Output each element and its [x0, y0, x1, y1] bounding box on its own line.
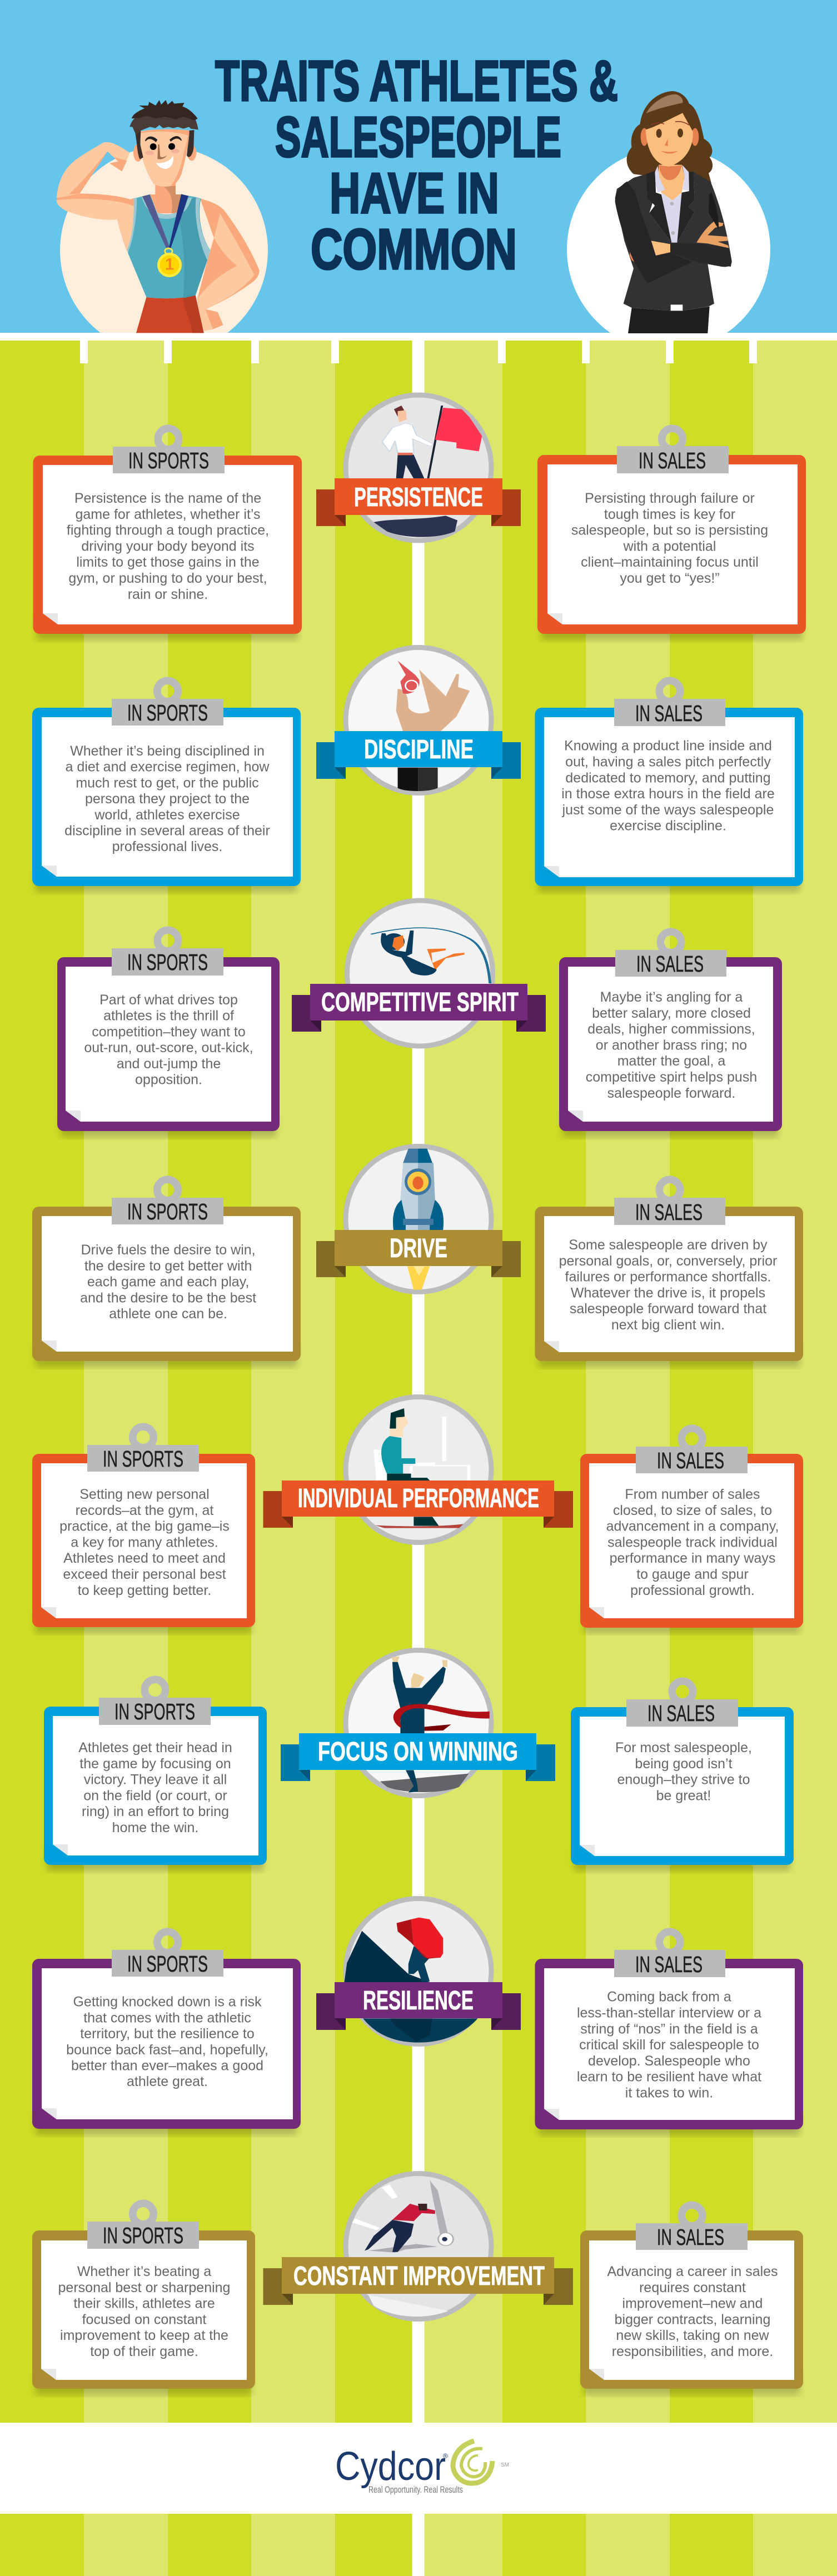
banner: resilience: RESILIENCE	[363, 1986, 474, 2015]
in sports card: fighting through a tough practice,	[67, 523, 269, 538]
trait row 3: competitive spirit	[57, 901, 782, 1137]
in sales card	[580, 1428, 803, 1633]
in sales card: dedicated to memory, and putting	[565, 770, 771, 786]
in sales card: matter the goal, a	[617, 1053, 725, 1069]
in sports card: that comes with the athletic	[83, 2010, 251, 2025]
in sports card: bounce back fast–and, hopefully,	[66, 2042, 268, 2058]
header panel	[0, 0, 837, 354]
in sales card: Whatever the drive is, it propels	[571, 1285, 765, 1300]
in sales card: Maybe it’s angling for a	[600, 989, 743, 1005]
in sports card: Persistence is the name of the	[74, 491, 261, 506]
in sports card	[32, 681, 301, 892]
footer band with logo	[0, 2423, 837, 2514]
in sales card: you get to “yes!”	[620, 571, 720, 586]
title: SALESPEOPLE	[275, 105, 561, 169]
in sports card: Athletes need to meet and	[63, 1550, 226, 1566]
in sales card: critical skill for salespeople to	[579, 2037, 759, 2053]
in sales card: to gauge and spur	[636, 1567, 749, 1582]
in sports card: personal best or sharpening	[58, 2280, 230, 2295]
in sports card: each game and each play,	[87, 1274, 249, 1290]
in sales card: For most salespeople,	[615, 1740, 752, 1755]
in sports card: competition–they want to	[92, 1024, 246, 1039]
in sports card: to keep getting better.	[78, 1583, 211, 1598]
medallion: person at desk	[346, 1397, 491, 1542]
icon: athlete with medal: 1	[165, 256, 174, 274]
in sales card: IN SALES	[639, 448, 706, 473]
in sports card: territory, but the resilience to	[80, 2026, 255, 2042]
in sales card: deals, higher commissions,	[587, 1022, 755, 1037]
in sales card: IN SALES	[635, 1952, 703, 1977]
in sports card: practice, at the big game–is	[59, 1519, 230, 1534]
trait row 8: constant improvement	[32, 2173, 803, 2395]
in sports card: better than ever–makes a good	[71, 2058, 263, 2073]
in sports card: Whether it’s beating a	[77, 2264, 211, 2279]
in sports card	[32, 1932, 301, 2135]
banner: discipline: DISCIPLINE	[364, 735, 474, 764]
in sales card: enough–they strive to	[617, 1772, 750, 1788]
in sports card: Drive fuels the desire to win,	[81, 1242, 256, 1258]
banner: persistence: PERSISTENCE	[354, 483, 483, 512]
in sports card: Whether it’s being disciplined in	[70, 743, 265, 759]
in sports card: gym, or pushing to do your best,	[68, 571, 267, 586]
in sales card: it takes to win.	[625, 2085, 713, 2101]
in sports card: athlete great.	[127, 2074, 208, 2089]
medallion: rocket	[346, 1147, 491, 1292]
banner: focus on winning	[281, 1733, 555, 1781]
in sales card: next big client win.	[611, 1317, 725, 1333]
in sports card: professional lives.	[112, 839, 222, 854]
banner: individual performance	[263, 1480, 573, 1528]
in sales card: personal goals, or, conversely, prior	[559, 1253, 777, 1269]
in sports card: opposition.	[135, 1072, 202, 1088]
in sales card: From number of sales	[625, 1487, 760, 1502]
medallion: winner crossing finish line	[346, 1650, 491, 1795]
banner: competitive spirit: COMPETITIVE SPIRIT	[321, 988, 519, 1017]
in sales card: just some of the ways salespeople	[562, 802, 774, 818]
trait row 5: individual performance	[32, 1397, 803, 1633]
in sales card: salespeople, but so is persisting	[571, 523, 768, 538]
logo: Cydcor: SM	[501, 2462, 509, 2468]
medallion: person pushing gauge needle	[346, 2173, 491, 2319]
in sales card: IN SALES	[657, 2224, 724, 2250]
in sales card: salespeople track individual	[607, 1534, 778, 1550]
in sales card: new skills, taking on new	[616, 2328, 770, 2343]
in sports card: athletes is the thrill of	[103, 1008, 234, 1024]
banner: drive: DRIVE	[390, 1234, 447, 1263]
in sports card: Part of what drives top	[99, 992, 238, 1008]
in sales card: performance in many ways	[610, 1550, 775, 1566]
in sales card	[559, 932, 782, 1137]
logo: Cydcor: Cydcor	[335, 2444, 446, 2489]
in sports card: driving your body beyond its	[81, 538, 255, 554]
medallion: pole vaulter	[347, 901, 492, 1046]
in sports card: IN SPORTS	[127, 1951, 208, 1977]
icon: athlete with medal	[57, 100, 260, 333]
in sports card: out-run, out-score, out-kick,	[84, 1040, 253, 1056]
in sports card: records–at the gym, at	[76, 1503, 213, 1518]
banner: focus on winning: FOCUS ON WINNING	[318, 1737, 518, 1767]
in sales card: less-than-stellar interview or a	[577, 2005, 761, 2021]
in sports card: ring) in an effort to bring	[82, 1804, 229, 1819]
title	[215, 49, 618, 281]
in sales card: failures or performance shortfalls.	[565, 1269, 771, 1285]
logo: Cydcor	[335, 2441, 509, 2495]
in sports card: victory. They leave it all	[84, 1772, 227, 1788]
in sales card: Some salespeople are driven by	[569, 1237, 768, 1253]
in sports card	[32, 1427, 255, 1633]
in sales card	[535, 1179, 803, 1367]
in sports card: game for athletes, whether it’s	[75, 507, 261, 522]
in sports card: IN SPORTS	[103, 2223, 183, 2248]
in sales card: Coming back from a	[607, 1989, 731, 2005]
banner: individual performance: INDIVIDUAL PERFORMANCE	[298, 1484, 539, 1513]
in sales card: out, having a sales pitch perfectly	[565, 754, 771, 770]
in sales card: salespeople forward.	[607, 1086, 735, 1101]
in sales card	[535, 1932, 803, 2135]
in sales card: competitive spirt helps push	[586, 1069, 757, 1085]
banner: drive	[316, 1230, 521, 1277]
in sports card: a key for many athletes.	[71, 1534, 218, 1550]
in sales card: client–maintaining focus until	[581, 554, 759, 570]
logo: Cydcor: ®	[443, 2452, 448, 2460]
in sales card: learn to be resilient have what	[577, 2069, 761, 2085]
in sales card: closed, to size of sales, to	[613, 1503, 772, 1518]
in sales card: with a potential	[623, 538, 716, 554]
in sports card: their skills, athletes are	[73, 2296, 215, 2312]
icon: businesswoman with crossed arms	[615, 91, 732, 333]
in sports card	[32, 1179, 301, 1367]
in sales card: better salary, more closed	[592, 1006, 751, 1021]
in sports card: the game by focusing on	[79, 1756, 231, 1772]
in sports card: IN SPORTS	[127, 1199, 208, 1224]
in sales card	[535, 681, 803, 892]
in sports card: discipline in several areas of their	[64, 823, 270, 839]
in sports card: athlete one can be.	[109, 1306, 227, 1322]
trait row 4: drive	[32, 1147, 803, 1367]
in sales card: IN SALES	[635, 1199, 703, 1225]
in sales card: salespeople forward toward that	[570, 1301, 766, 1317]
in sports card	[33, 428, 302, 640]
in sales card: requires constant	[639, 2280, 746, 2295]
in sports card	[44, 1679, 267, 1871]
in sports card: improvement to keep at the	[60, 2328, 228, 2343]
in sports card: Setting new personal	[79, 1487, 210, 1502]
banner: persistence	[316, 478, 521, 526]
in sales card: IN SALES	[657, 1448, 724, 1473]
medallion: flag bearer	[346, 395, 491, 541]
in sports card: exceed their personal best	[63, 1567, 226, 1582]
in sales card: in those extra hours in the field are	[561, 786, 775, 802]
in sports card: Athletes get their head in	[78, 1740, 232, 1755]
in sales card: IN SALES	[635, 701, 703, 726]
in sales card: exercise discipline.	[610, 818, 726, 834]
in sports card: IN SPORTS	[127, 949, 208, 975]
in sales card	[571, 1681, 794, 1871]
banner: constant improvement	[263, 2257, 573, 2305]
in sports card: home the win.	[112, 1820, 198, 1835]
in sports card: IN SPORTS	[127, 700, 208, 726]
in sales card: responsibilities, and more.	[612, 2344, 773, 2359]
in sports card: a diet and exercise regimen, how	[66, 759, 270, 775]
in sales card: develop. Salespeople who	[588, 2053, 750, 2069]
in sales card	[537, 428, 806, 640]
in sales card: being good isn’t	[635, 1756, 733, 1772]
in sports card: top of their game.	[90, 2344, 198, 2359]
in sports card: focused on constant	[82, 2312, 206, 2327]
in sports card	[57, 930, 280, 1137]
in sales card: be great!	[656, 1788, 711, 1803]
in sales card: IN SALES	[647, 1700, 715, 1726]
banner: discipline	[316, 731, 521, 779]
banner: resilience	[316, 1982, 521, 2030]
in sales card	[580, 2205, 803, 2395]
trait row 7: resilience	[32, 1899, 803, 2135]
in sales card: professional growth.	[630, 1583, 755, 1598]
in sales card: improvement–new and	[622, 2296, 763, 2312]
in sports card: limits to get those gains in the	[76, 554, 260, 570]
trait row 1: persistence	[33, 395, 806, 640]
in sports card: the desire to get better with	[84, 1258, 252, 1274]
in sales card: string of “nos” in the field is a	[580, 2021, 758, 2037]
in sports card: persona they project to the	[85, 791, 250, 807]
in sports card: IN SPORTS	[103, 1446, 183, 1472]
title: COMMON	[311, 217, 517, 281]
in sales card: IN SALES	[636, 951, 704, 977]
title: HAVE IN	[330, 161, 499, 225]
in sales card: Advancing a career in sales	[607, 2264, 778, 2279]
in sports card: much rest to get, or the public	[76, 775, 259, 791]
in sales card: bigger contracts, learning	[615, 2312, 770, 2327]
in sports card: and out-jump the	[117, 1056, 221, 1072]
logo: Cydcor: Real Opportunity. Real Results	[368, 2484, 463, 2495]
banner: constant improvement: CONSTANT IMPROVEMENT	[293, 2262, 545, 2291]
medallion: person lifting boulder	[345, 1899, 491, 2044]
in sales card: or another brass ring; no	[596, 1037, 747, 1053]
in sports card: rain or shine.	[128, 587, 208, 602]
in sales card: advancement in a company,	[606, 1519, 779, 1534]
in sales card: tough times is key for	[604, 507, 735, 522]
in sales card: Persisting through failure or	[585, 491, 755, 506]
in sports card: on the field (or court, or	[83, 1788, 227, 1803]
in sports card: Getting knocked down is a risk	[73, 1994, 262, 2010]
in sports card: and the desire to be the best	[80, 1290, 256, 1305]
trait row 2: discipline	[32, 648, 803, 892]
banner: competitive spirit	[292, 984, 546, 1032]
in sports card: IN SPORTS	[128, 448, 209, 473]
title: TRAITS ATHLETES &	[215, 49, 618, 113]
medallion: whistle in hand	[346, 648, 491, 793]
trait row 6: focus on winning	[44, 1650, 794, 1871]
in sports card: IN SPORTS	[114, 1699, 195, 1724]
in sports card	[32, 2203, 255, 2395]
in sports card: world, athletes exercise	[94, 807, 240, 823]
in sales card: Knowing a product line inside and	[564, 738, 772, 754]
